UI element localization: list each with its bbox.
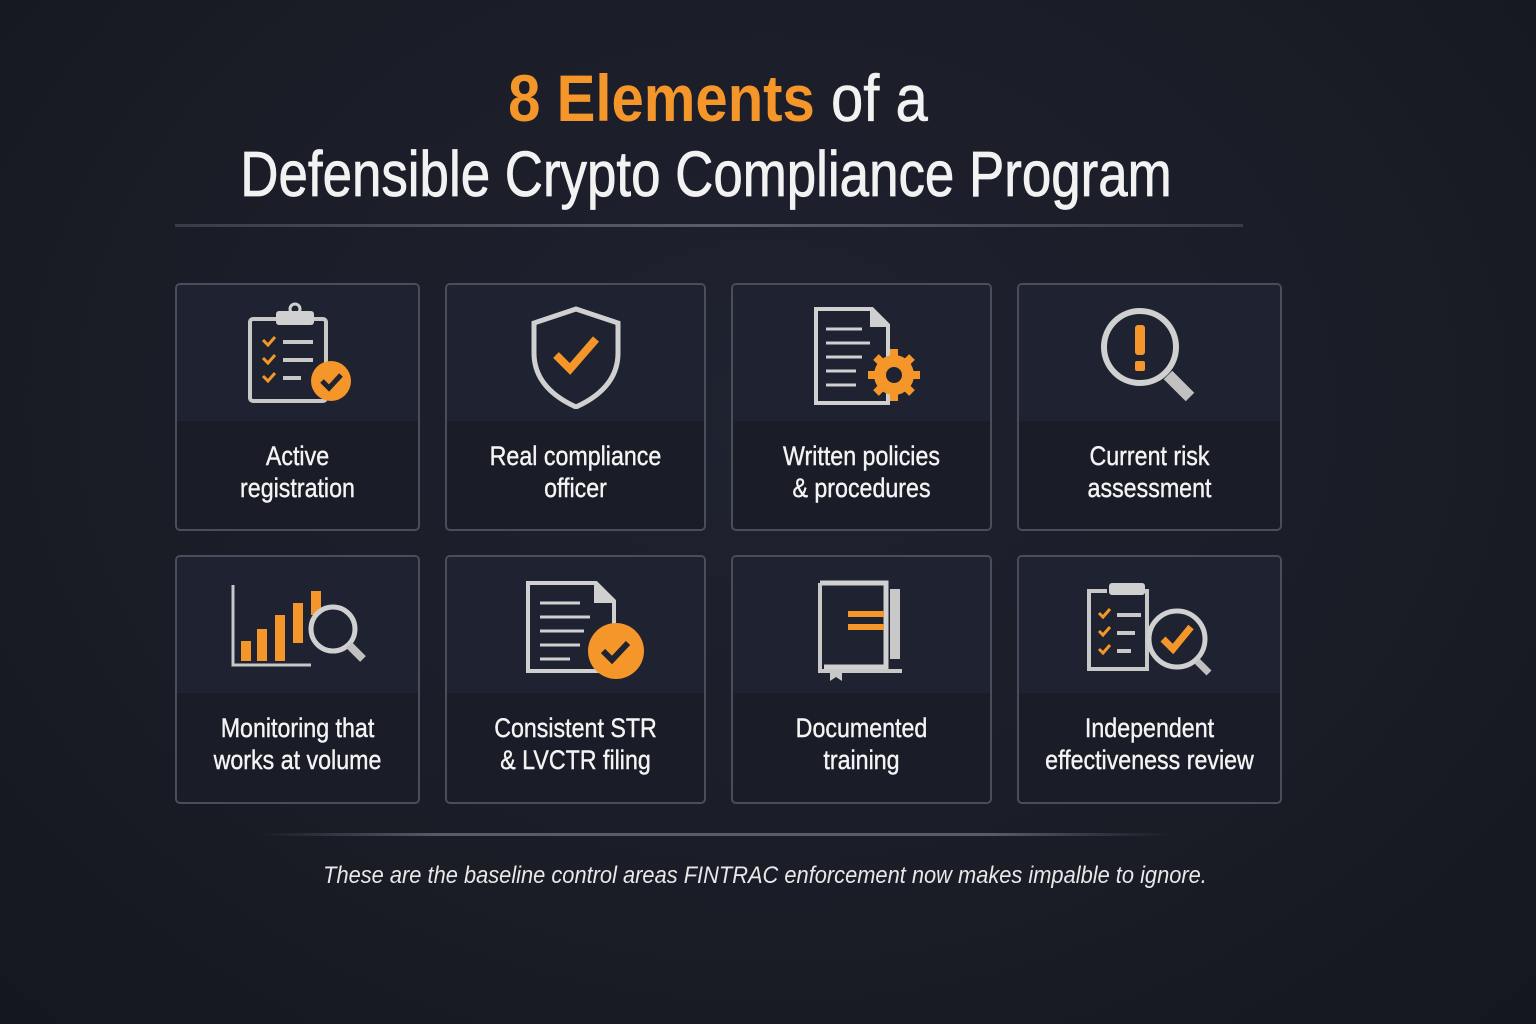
footer note: These are the baseline control areas FINTRAC enforcement now makes impalble to ignore. — [323, 862, 1207, 889]
label — [1088, 441, 1212, 503]
label: Current risk — [1090, 441, 1209, 471]
label: Independent — [1085, 713, 1214, 743]
label: training — [823, 745, 900, 775]
text: Defensible Crypto Compliance Program — [240, 138, 1172, 210]
label: effectiveness review — [1045, 745, 1254, 775]
icon: chart magnifier — [232, 585, 366, 666]
label: officer — [544, 473, 607, 503]
icon: magnifier alert — [1101, 308, 1194, 402]
icon: shield — [532, 306, 620, 409]
label: assessment — [1088, 473, 1211, 503]
label: & procedures — [792, 473, 931, 503]
label: Active — [266, 441, 329, 471]
label — [490, 441, 661, 503]
icon: clipboard magnifier — [1087, 583, 1212, 676]
card: compliance officer — [445, 283, 706, 531]
card: monitoring — [175, 555, 420, 804]
label — [1045, 713, 1254, 775]
label: registration — [240, 473, 355, 503]
label: Written policies — [783, 441, 940, 471]
icon: document check — [526, 581, 644, 679]
card: STR filing — [445, 555, 706, 804]
text: 8 Elements of a — [508, 61, 928, 135]
icon: document gear — [814, 307, 920, 405]
card: written policies — [731, 283, 992, 531]
label: Real compliance — [490, 441, 661, 471]
label — [240, 441, 355, 503]
label: Documented — [796, 713, 927, 743]
label: & LVCTR filing — [500, 745, 651, 775]
icon: book — [818, 580, 902, 681]
label — [782, 441, 940, 503]
label — [494, 713, 657, 775]
card: active registration — [175, 283, 420, 531]
icon: clipboard check — [248, 302, 351, 403]
title — [240, 61, 1172, 210]
label: Consistent STR — [494, 713, 657, 743]
label — [796, 713, 927, 775]
label: works at volume — [214, 745, 381, 775]
label — [213, 713, 381, 775]
card: risk assessment — [1017, 283, 1282, 531]
card: independent review — [1017, 555, 1282, 804]
label: Monitoring that — [221, 713, 374, 743]
card: training — [731, 555, 992, 804]
